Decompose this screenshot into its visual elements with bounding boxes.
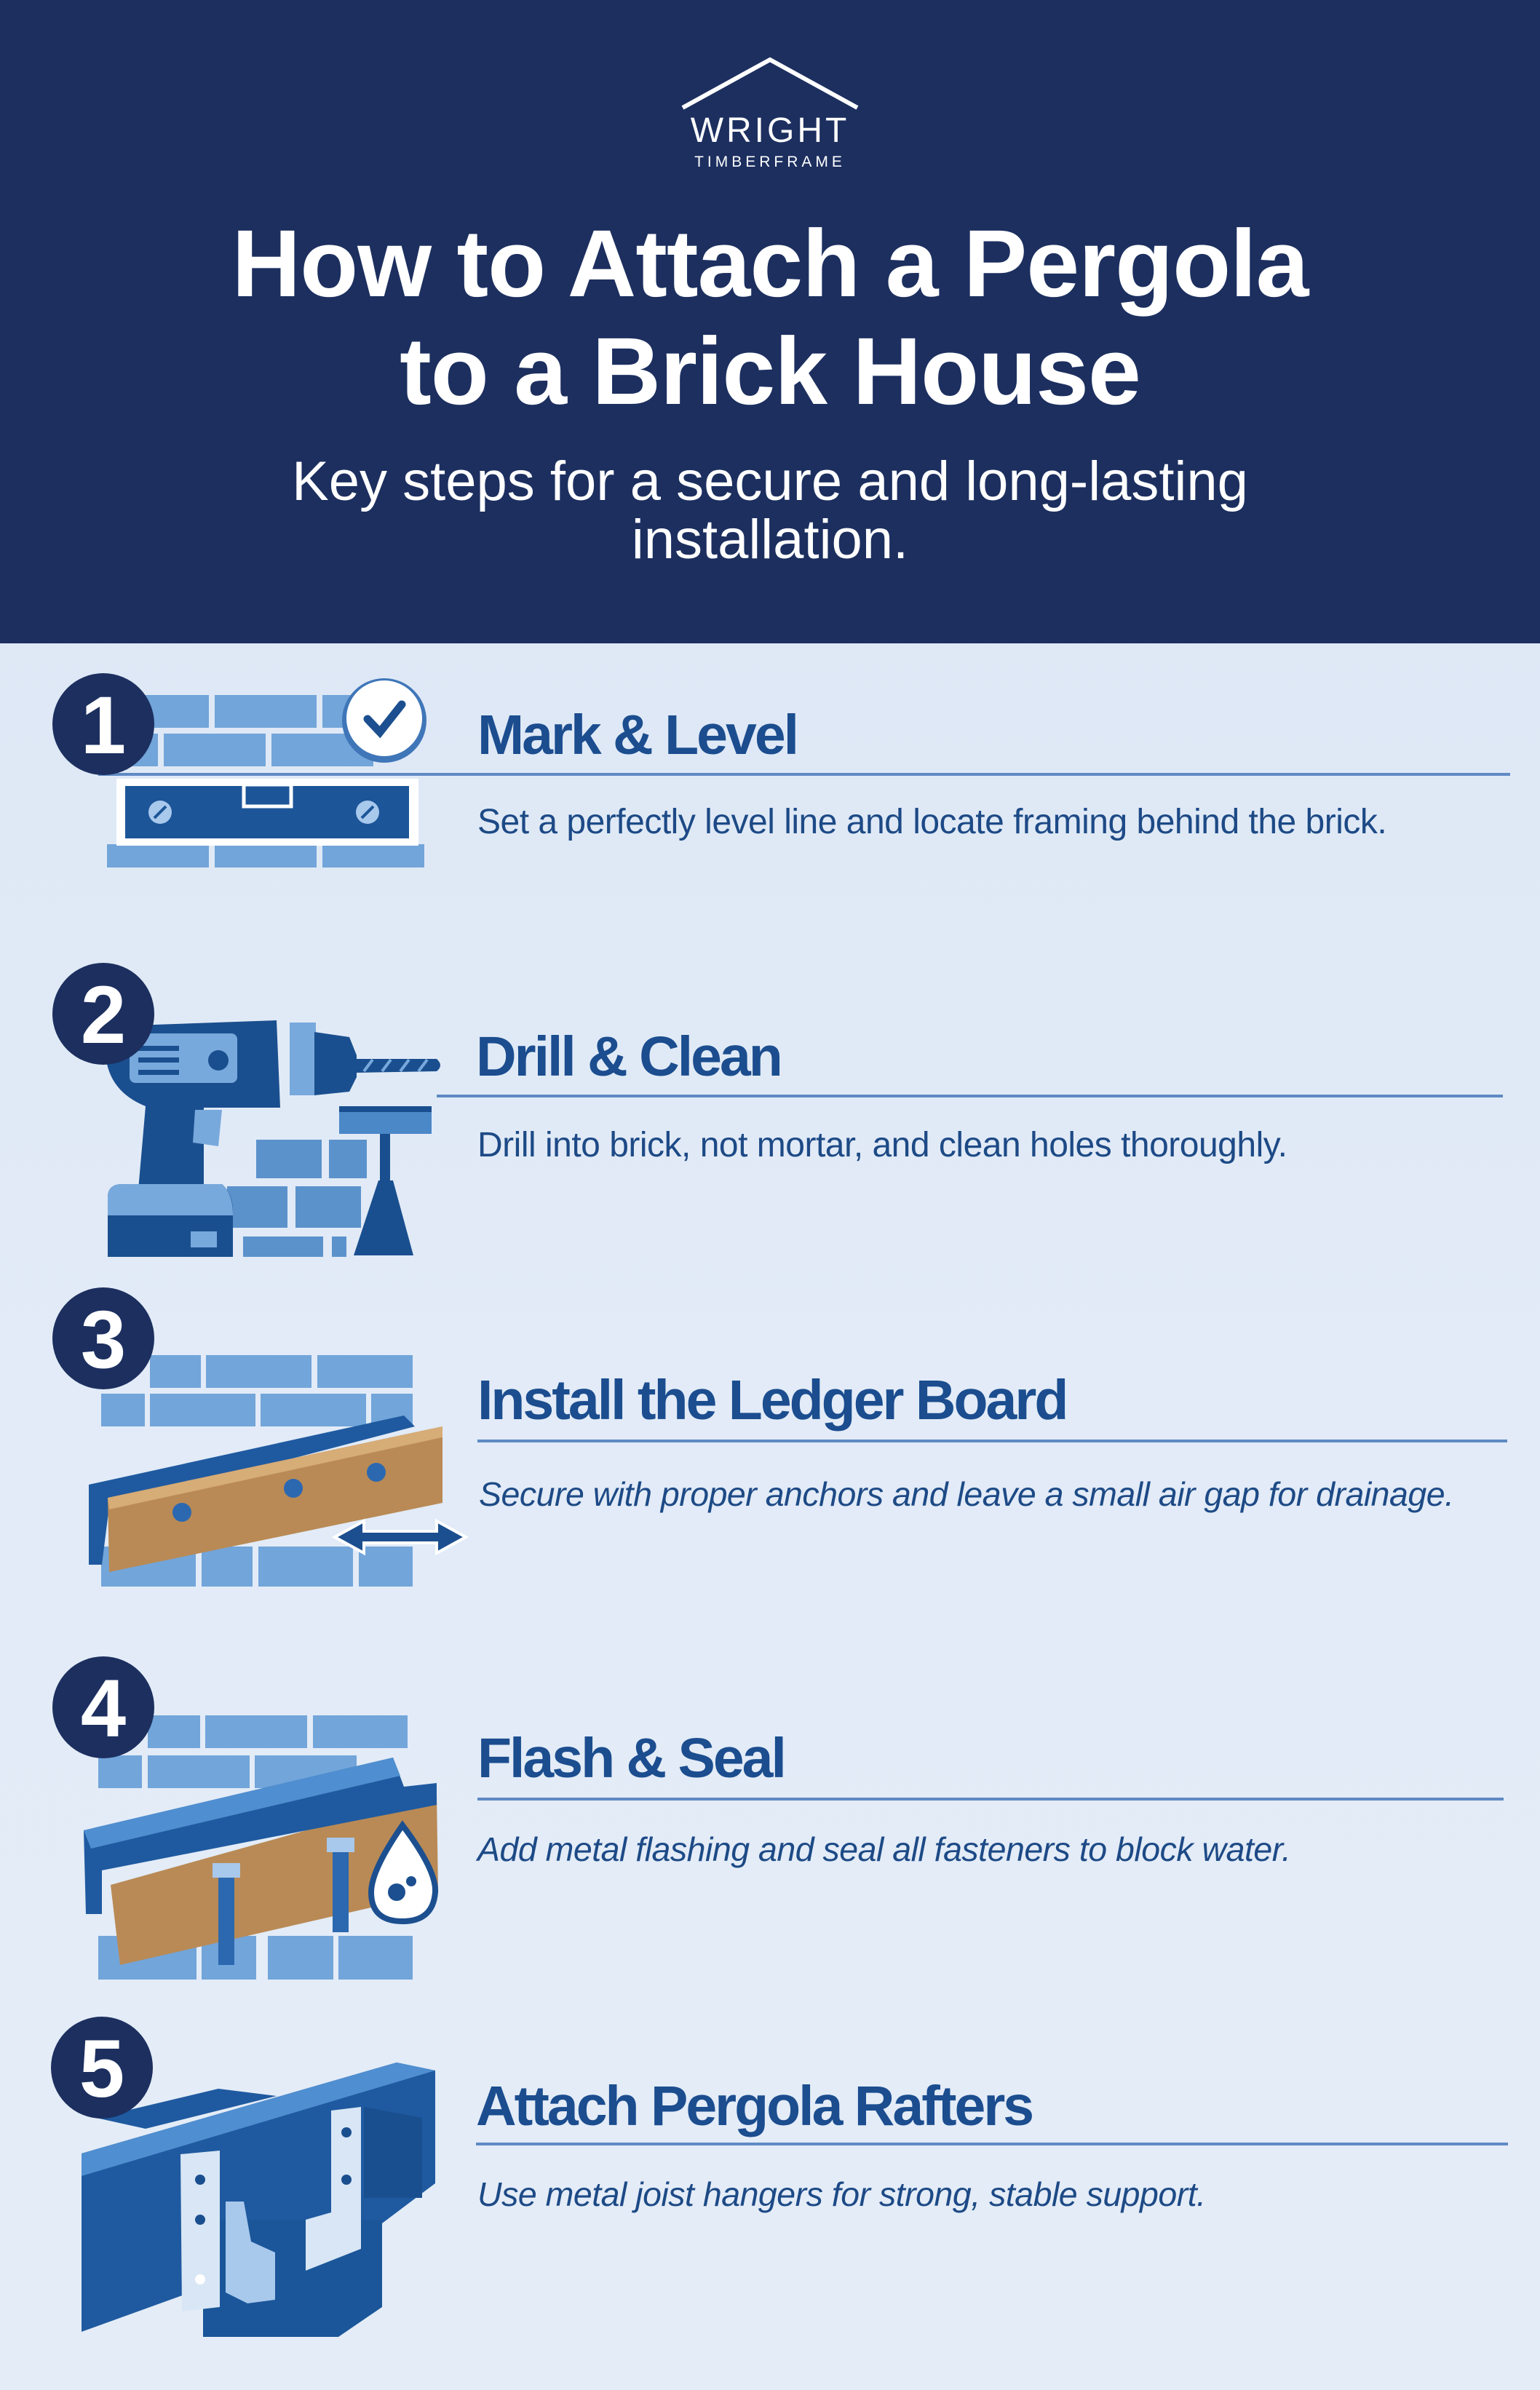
number badge 3: [52, 1287, 154, 1389]
heading: Install the Ledger Board: [477, 1369, 1066, 1432]
number badge 3: 3: [81, 1294, 126, 1385]
icon: brick wall with level: [107, 678, 426, 868]
number badge 1: 1: [81, 680, 126, 771]
logo: WRIGHT: [691, 111, 849, 150]
number badge 5: [51, 2017, 153, 2119]
number badge 2: 2: [81, 969, 126, 1060]
description: Secure with proper anchors and leave a small air gap for drainage.: [479, 1475, 1454, 1513]
logo: [681, 57, 859, 170]
number badge 1: [52, 673, 154, 775]
number badge 5: 5: [79, 2023, 124, 2114]
title: How to Attach a Pergola: [232, 210, 1308, 317]
step 2 text: [437, 1025, 1503, 1164]
step 3 text: [477, 1369, 1507, 1513]
header band: [0, 0, 1540, 643]
number badge 4: 4: [81, 1663, 126, 1754]
description: Use metal joist hangers for strong, stable support.: [477, 2175, 1206, 2213]
heading: Flash & Seal: [477, 1727, 785, 1790]
icon: flashing and seal: [84, 1715, 438, 1980]
step 1 text: [98, 704, 1510, 841]
title: to a Brick House: [400, 317, 1140, 424]
description: Add metal flashing and seal all fasteners to block water.: [477, 1830, 1290, 1868]
subtitle: installation.: [632, 509, 908, 571]
heading: Drill & Clean: [476, 1025, 781, 1088]
step 4 text: [476, 1727, 1504, 1868]
title: [232, 210, 1310, 424]
step 5 text: [476, 2075, 1508, 2213]
description: Drill into brick, not mortar, and clean holes thoroughly.: [477, 1126, 1287, 1164]
icon: drill and brush: [106, 1020, 440, 1257]
icon: rafter with joist hangers: [82, 2063, 435, 2337]
heading: Mark & Level: [477, 704, 797, 766]
icon: ledger board: [89, 1355, 466, 1587]
logo: TIMBERFRAME: [694, 154, 846, 170]
number badge 4: [52, 1656, 154, 1758]
heading: Attach Pergola Rafters: [476, 2075, 1032, 2137]
subtitle: Key steps for a secure and long-lasting: [292, 450, 1248, 512]
number badge 2: [52, 963, 154, 1065]
description: Set a perfectly level line and locate framing behind the brick.: [477, 803, 1386, 841]
subtitle: [292, 450, 1248, 571]
